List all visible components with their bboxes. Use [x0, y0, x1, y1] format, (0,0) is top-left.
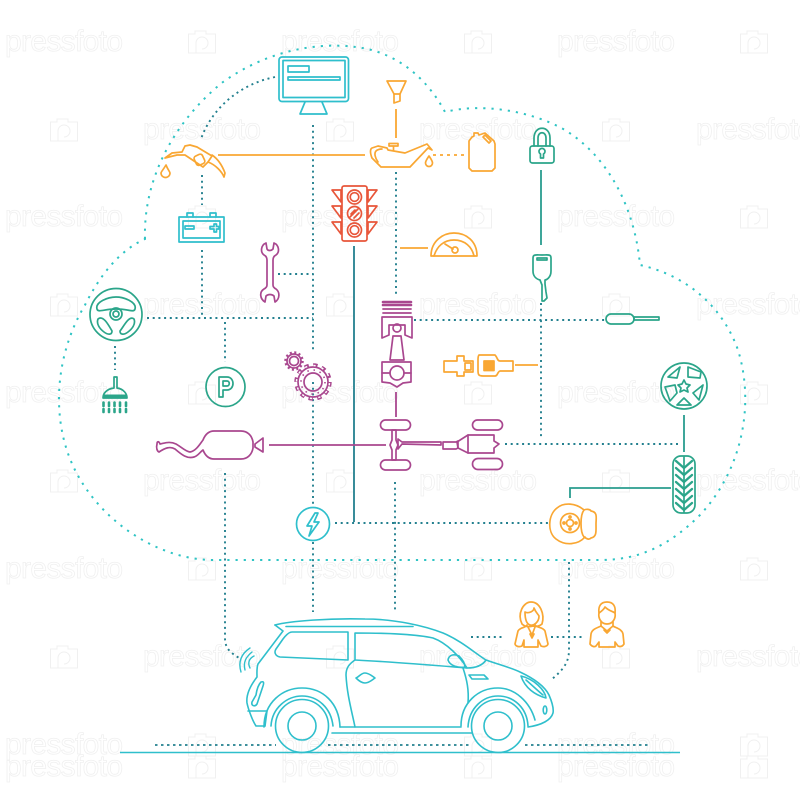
wing mirror — [448, 655, 465, 667]
watermarks: pressfoto — [419, 288, 537, 321]
watermarks: pressfoto — [5, 750, 123, 783]
car — [247, 619, 553, 752]
rear wheel and arch — [264, 688, 340, 727]
icon: signal waves — [240, 648, 254, 672]
icon: traffic light — [332, 186, 377, 241]
icon: fuel nozzle — [161, 145, 225, 178]
watermarks: pressfoto — [419, 640, 537, 673]
front wheel and arch — [461, 688, 535, 726]
watermarks: pressfoto — [143, 464, 261, 497]
icon: lightning power circle — [296, 508, 330, 540]
icon: speedometer gauge — [431, 233, 477, 256]
watermarks: pressfoto — [281, 728, 399, 761]
icon: car key — [533, 255, 551, 301]
watermarks: pressfoto — [143, 288, 261, 321]
fog lamp — [543, 706, 547, 714]
headlight — [521, 676, 546, 698]
side indicator — [469, 675, 488, 679]
watermarks: pressfoto — [281, 25, 399, 58]
icon: steering wheel — [90, 288, 142, 340]
icon: drivetrain chassis — [380, 420, 502, 470]
watermarks: pressfoto — [281, 552, 399, 585]
watermarks: pressfoto — [419, 464, 537, 497]
watermarks: pressfoto — [5, 25, 123, 58]
icon: woman passenger — [515, 602, 548, 647]
door handle — [356, 673, 375, 683]
tail light — [252, 682, 264, 706]
door window — [355, 633, 467, 668]
icon: alloy wheel — [661, 363, 707, 409]
icon: engine piston — [382, 302, 412, 387]
large gear — [296, 365, 330, 399]
road — [120, 745, 680, 752]
dotted connector network — [115, 77, 680, 680]
icon: man passenger — [590, 602, 624, 647]
watermarks: pressfoto — [281, 750, 399, 783]
watermarks: pressfoto — [281, 200, 399, 233]
watermarks: pressfoto — [557, 200, 675, 233]
icon: screwdriver — [606, 314, 659, 324]
watermarks: pressfoto — [5, 728, 123, 761]
watermarks: pressfoto — [557, 376, 675, 409]
icon: exhaust muffler — [157, 431, 263, 459]
icon: brake disc — [550, 504, 596, 544]
watermarks: pressfoto — [143, 640, 261, 673]
watermarks: pressfoto — [5, 552, 123, 585]
small gear — [286, 352, 302, 370]
icon: seat belt buckle — [444, 355, 513, 376]
watermarks: pressfoto — [557, 25, 675, 58]
watermarks: pressfoto — [557, 750, 675, 783]
watermarks: pressfoto — [5, 376, 123, 409]
icon: jerry can — [469, 133, 495, 171]
icon: parking sign — [206, 368, 245, 406]
watermarks: pressfoto — [143, 113, 261, 146]
icon: car battery — [179, 213, 224, 242]
icon: funnel — [387, 81, 406, 103]
watermarks: pressfoto — [557, 728, 675, 761]
cloud outline — [59, 46, 745, 560]
icon: wrench — [261, 243, 279, 302]
icon: car wash shower — [103, 377, 127, 412]
car body outline — [275, 619, 553, 727]
icon: tire tread — [673, 456, 695, 513]
icon: computer monitor — [279, 57, 348, 114]
solid connector lines — [218, 109, 684, 522]
watermarks: pressfoto — [281, 376, 399, 409]
watermarks: pressfoto — [5, 200, 123, 233]
rear window — [275, 632, 348, 660]
icon: gears — [286, 352, 330, 399]
door outline — [346, 660, 355, 727]
icon: padlock — [530, 128, 554, 163]
connector lines — [115, 77, 684, 680]
watermarks: pressfoto — [419, 113, 537, 146]
watermarks: pressfoto — [557, 552, 675, 585]
icon: oil can — [370, 144, 432, 167]
